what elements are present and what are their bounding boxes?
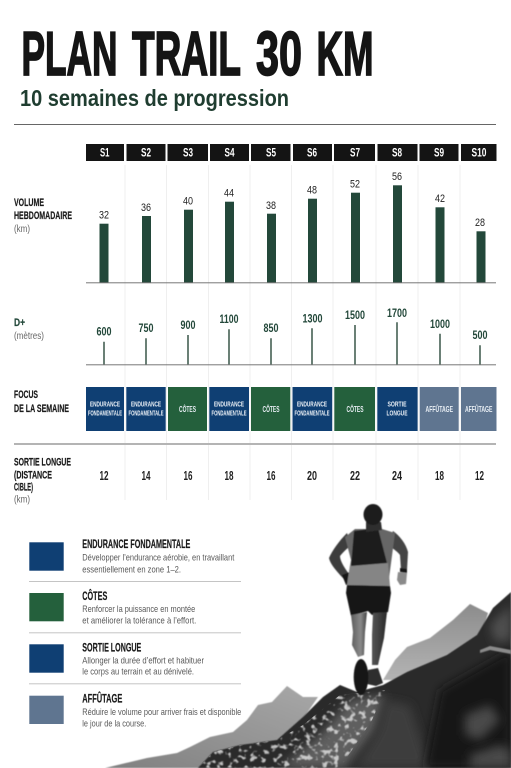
title: KM: [316, 20, 374, 89]
row label: focus: FOCUS: [14, 389, 38, 401]
title: 30: [256, 20, 302, 89]
long run distance values: 22: [350, 469, 360, 483]
long run distance values: 20: [307, 469, 317, 483]
shoes: [367, 668, 383, 686]
bar chart: weekly volume: [86, 171, 496, 283]
week header row: S8: [392, 148, 402, 160]
week header row: S6: [307, 148, 317, 160]
long run distance values: 18: [435, 469, 444, 483]
row label: sortie longue: [14, 457, 71, 506]
long run distance values: 16: [266, 469, 276, 483]
lollipop chart: elevation gain: [86, 306, 496, 365]
bar chart: weekly volume: 42: [435, 193, 445, 205]
row label: sortie longue: CIBLE): [14, 482, 33, 494]
legend item: sortie longue: SORTIE LONGUE: [82, 640, 141, 654]
bar chart: weekly volume: 40: [183, 196, 193, 208]
legend item: côtes: CÔTES: [82, 588, 107, 603]
bar chart: weekly volume: 38: [266, 200, 276, 212]
bar chart: weekly volume: 28: [475, 217, 485, 229]
focus blocks: [86, 387, 496, 431]
right distant mountain: [383, 604, 488, 680]
week header row: S1: [100, 148, 110, 160]
focus blocks: FONDAMENTALE: [88, 409, 122, 418]
row label: focus: [14, 389, 69, 415]
torso: [345, 529, 395, 586]
week header row: [86, 144, 496, 161]
legend item: affûtage: le jour de la course.: [82, 719, 146, 730]
long run distance values: 16: [184, 469, 193, 483]
runner right arm: [388, 531, 408, 570]
legend item: côtes: [29, 588, 196, 627]
shorts: [346, 585, 391, 616]
focus blocks: ENDURANCE: [214, 399, 244, 408]
legend item: côtes: Renforcer la puissance en montée: [82, 604, 195, 615]
row label: focus: DE LA SEMAINE: [14, 403, 69, 415]
runner: [329, 504, 408, 695]
legend item: sortie longue: le corps au terrain et au dénivelé.: [82, 667, 194, 678]
lollipop chart: elevation gain: 1000: [430, 317, 450, 331]
row label: D+: (mètres): [14, 331, 44, 342]
row label: volume hebdomadaire: [14, 197, 72, 235]
long run distance values: 18: [224, 469, 234, 483]
bar chart: weekly volume: 32: [99, 210, 109, 222]
legend item: sortie longue: [29, 640, 204, 678]
focus blocks: CÔTES: [179, 403, 196, 414]
row label: sortie longue: (DISTANCE: [14, 470, 52, 482]
lollipop chart: elevation gain: 1700: [387, 306, 407, 320]
row label: volume hebdomadaire: (km): [14, 224, 30, 235]
lollipop chart: elevation gain: 1300: [302, 312, 323, 326]
lollipop chart: elevation gain: 750: [138, 321, 154, 335]
week header row: S9: [434, 148, 444, 160]
row label: D+: [14, 317, 44, 342]
week header row: S4: [224, 148, 235, 160]
lollipop chart: elevation gain: 900: [180, 318, 196, 332]
foreground hillside: [198, 592, 511, 768]
row label: sortie longue: (km): [14, 495, 30, 506]
bar chart: weekly volume: 44: [224, 188, 234, 200]
long run distance values: 12: [475, 469, 484, 483]
focus blocks: AFFÛTAGE: [426, 403, 453, 414]
focus blocks: LONGUE: [386, 409, 408, 418]
legend item: côtes: et améliorer la tolérance à l’effort.: [82, 616, 196, 627]
lollipop chart: elevation gain: 850: [264, 321, 279, 335]
lollipop chart: elevation gain: 1500: [345, 308, 365, 322]
subtitle: 10 semaines de progression: [20, 85, 289, 111]
runner left arm: [329, 533, 351, 579]
row label: volume hebdomadaire: VOLUME: [14, 197, 44, 209]
legend item: endurance fondamentale: [29, 537, 235, 575]
focus blocks: FONDAMENTALE: [128, 409, 164, 418]
lollipop chart: elevation gain: 1100: [220, 312, 239, 326]
long run distance values: [100, 469, 484, 483]
title: [22, 20, 374, 89]
focus blocks: CÔTES: [346, 403, 364, 414]
row label: sortie longue: SORTIE LONGUE: [14, 457, 71, 469]
lollipop chart: elevation gain: 600: [96, 325, 112, 339]
week header row: S7: [350, 148, 360, 160]
week header row: S3: [183, 148, 193, 160]
long run distance values: 12: [100, 469, 109, 483]
legend item: sortie longue: Allonger la durée d’effort et habituer: [82, 655, 204, 666]
long run distance values: 14: [142, 469, 151, 483]
legend: [29, 537, 241, 730]
legend item: endurance fondamentale: essentiellement en zone 1–2.: [82, 564, 181, 575]
photo: trail runner on mountain path: [105, 504, 511, 768]
focus blocks: ENDURANCE: [131, 399, 161, 408]
week header row: S2: [141, 148, 151, 160]
focus blocks: AFFÛTAGE: [465, 403, 493, 414]
bar chart: weekly volume: 36: [141, 202, 151, 214]
long run distance values: 24: [392, 469, 402, 483]
legend item: affûtage: AFFÛTAGE: [82, 691, 122, 706]
row label: D+: D+: [14, 317, 25, 329]
title: PLAN: [22, 20, 118, 89]
bar chart: weekly volume: 48: [307, 184, 317, 196]
legend item: endurance fondamentale: Développer l’endurance aérobie, en travaillant: [82, 553, 235, 564]
bar chart: weekly volume: 52: [350, 178, 360, 190]
week header row: S10: [472, 148, 486, 160]
focus blocks: FONDAMENTALE: [212, 409, 246, 418]
focus blocks: ENDURANCE: [297, 399, 327, 408]
legend item: affûtage: Réduire le volume pour arriver frais et disponible: [82, 707, 241, 718]
legend item: affûtage: [29, 691, 241, 730]
legs: [351, 612, 367, 657]
focus blocks: CÔTES: [262, 403, 280, 414]
legend item: endurance fondamentale: ENDURANCE FONDAMENTALE: [82, 537, 190, 551]
title: TRAIL: [132, 20, 241, 89]
row label: volume hebdomadaire: HEBDOMADAIRE: [14, 210, 72, 222]
focus blocks: ENDURANCE: [90, 399, 120, 408]
left distant mountain: [105, 686, 318, 768]
lollipop chart: elevation gain: 500: [472, 328, 488, 342]
bar chart: weekly volume: 56: [392, 171, 402, 183]
focus blocks: SORTIE: [388, 399, 406, 408]
focus blocks: FONDAMENTALE: [294, 409, 330, 418]
week header row: S5: [266, 148, 276, 160]
